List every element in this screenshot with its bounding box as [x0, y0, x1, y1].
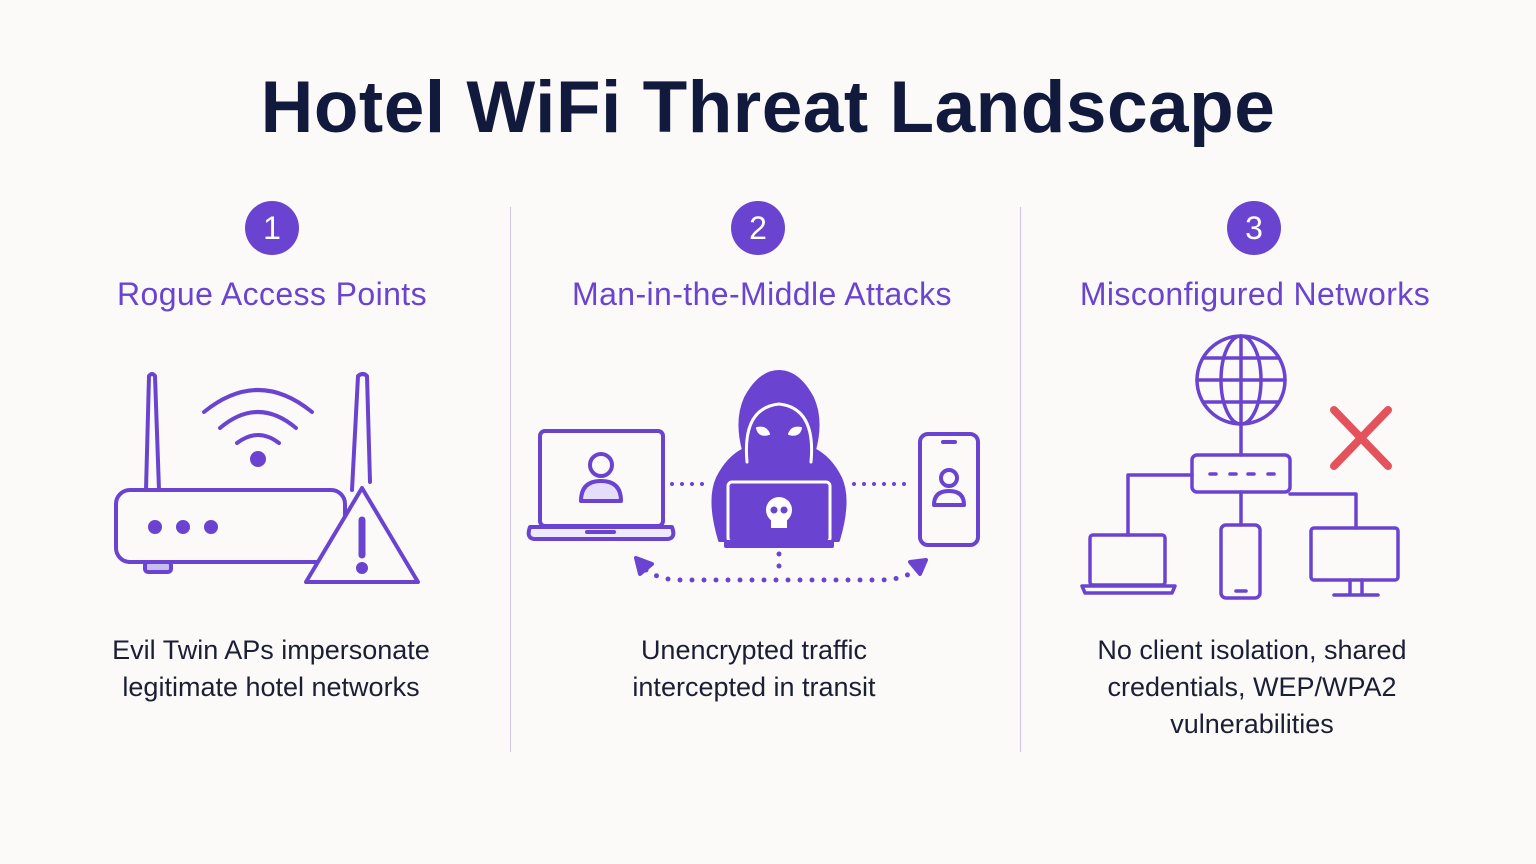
text 1: legitimate hotel networks [122, 672, 420, 702]
text 1 [112, 635, 430, 702]
icon: rogue router [116, 374, 418, 582]
number badge 1 [245, 201, 299, 255]
number badge 1: 1 [263, 210, 281, 246]
number badge 2: 2 [749, 210, 767, 246]
number badge 2 [731, 201, 785, 255]
heading 2: Man-in-the-Middle Attacks [572, 276, 952, 312]
text 2: Unencrypted traffic [641, 635, 867, 665]
icon: man in the middle [529, 372, 978, 580]
text 3: No client isolation, shared [1097, 635, 1407, 665]
icon: misconfigured network [1082, 336, 1398, 598]
text 2 [632, 635, 876, 702]
text 3 [1097, 635, 1407, 739]
text 3: vulnerabilities [1170, 709, 1334, 739]
text 2: intercepted in transit [632, 672, 876, 702]
text 1: Evil Twin APs impersonate [112, 635, 430, 665]
title: Hotel WiFi Threat Landscape [261, 67, 1275, 148]
heading 3: Misconfigured Networks [1080, 276, 1430, 312]
number badge 3: 3 [1245, 210, 1263, 246]
text 3: credentials, WEP/WPA2 [1107, 672, 1397, 702]
number badge 3 [1227, 201, 1281, 255]
heading 1: Rogue Access Points [117, 276, 427, 312]
